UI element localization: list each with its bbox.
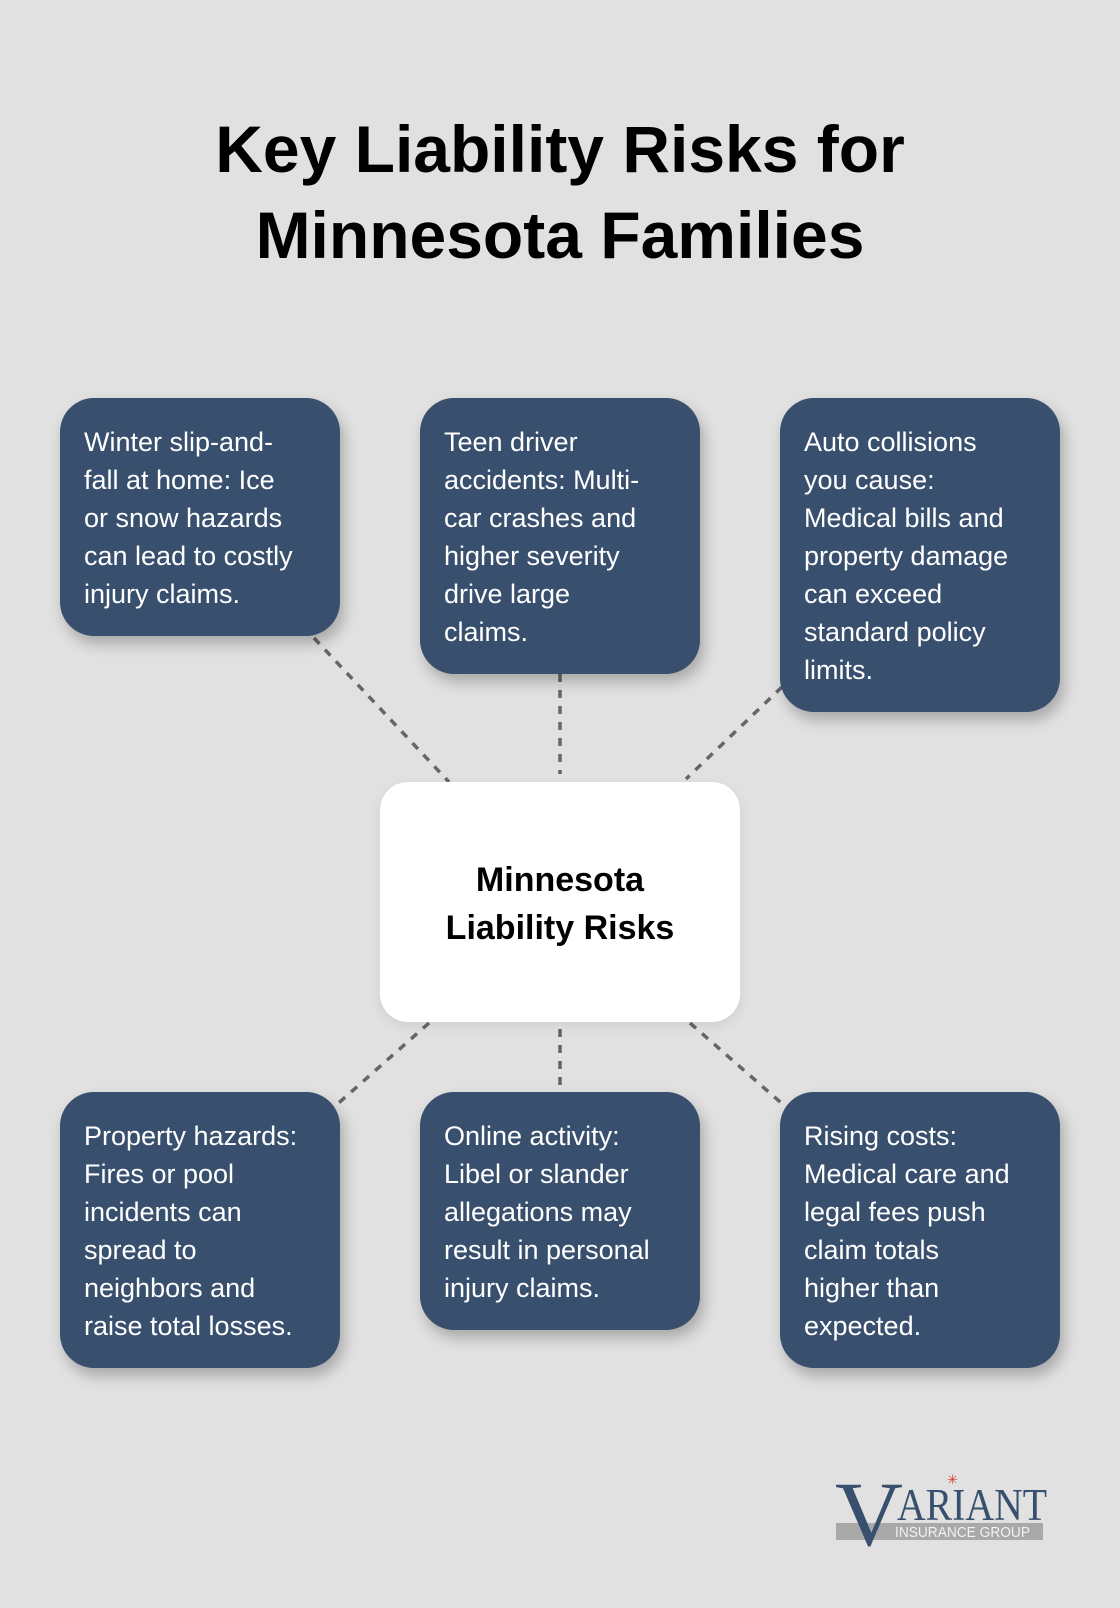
panel: property hazards: raise total losses. (84, 1311, 293, 1341)
panel: teen driver accidents: drive large (444, 579, 570, 609)
title: Key Liability Risks for (215, 112, 905, 186)
title: Minnesota Families (256, 198, 864, 272)
panel: online activity: Libel or slander (444, 1159, 629, 1189)
logo: Variant Insurance Group (835, 1470, 1047, 1560)
panel: teen driver accidents: car crashes and (444, 503, 636, 533)
center node (380, 782, 740, 1022)
panel: rising costs: Medical care and (804, 1159, 1010, 1189)
panel: rising costs: expected. (804, 1311, 921, 1341)
panel: property hazards: incidents can (84, 1197, 242, 1227)
panel: auto collisions: can exceed (804, 579, 942, 609)
panel: winter slip-and-fall: or snow hazards (84, 503, 282, 533)
panel: teen driver accidents: claims. (444, 617, 528, 647)
panel: online activity: Online activity: (444, 1121, 620, 1151)
panel: rising costs: legal fees push (804, 1197, 986, 1227)
panel: winter slip-and-fall: fall at home: Ice (84, 465, 275, 495)
panel: property hazards: Fires or pool (84, 1159, 234, 1189)
panel: property hazards (60, 1092, 340, 1368)
panel: auto collisions: limits. (804, 655, 873, 685)
panel: online activity: result in personal (444, 1235, 650, 1265)
panel: auto collisions: property damage (804, 541, 1008, 571)
panel: auto collisions: Auto collisions (804, 427, 977, 457)
panel: teen driver accidents (420, 398, 700, 674)
panel: rising costs: claim totals (804, 1235, 939, 1265)
panel: teen driver accidents: higher severity (444, 541, 620, 571)
panel: winter slip-and-fall: can lead to costly (84, 541, 293, 571)
panel: rising costs: Rising costs: (804, 1121, 957, 1151)
panel: property hazards: spread to (84, 1235, 197, 1265)
panel: winter slip-and-fall: injury claims. (84, 579, 240, 609)
panel: rising costs (780, 1092, 1060, 1368)
panel: rising costs: higher than (804, 1273, 939, 1303)
panel: property hazards: Property hazards: (84, 1121, 297, 1151)
panel: winter slip-and-fall: Winter slip-and- (84, 427, 273, 457)
panel: property hazards: neighbors and (84, 1273, 255, 1303)
panel: auto collisions: Medical bills and (804, 503, 1004, 533)
panel: winter slip-and-fall (60, 398, 340, 636)
panel: auto collisions (780, 398, 1060, 712)
center node: Minnesota (476, 861, 644, 899)
logo: Variant Insurance Group: INSURANCE GROUP (895, 1524, 1030, 1541)
panel: auto collisions: you cause: (804, 465, 935, 495)
panel: online activity: injury claims. (444, 1273, 600, 1303)
panel: online activity (420, 1092, 700, 1330)
panel: teen driver accidents: Teen driver (444, 427, 578, 457)
logo: Variant Insurance Group: ✳ (947, 1472, 958, 1487)
panel: auto collisions: standard policy (804, 617, 986, 647)
center node: Liability Risks (446, 909, 674, 947)
title (215, 112, 905, 272)
panel: online activity: allegations may (444, 1197, 632, 1227)
panel: teen driver accidents: accidents: Multi- (444, 465, 639, 495)
